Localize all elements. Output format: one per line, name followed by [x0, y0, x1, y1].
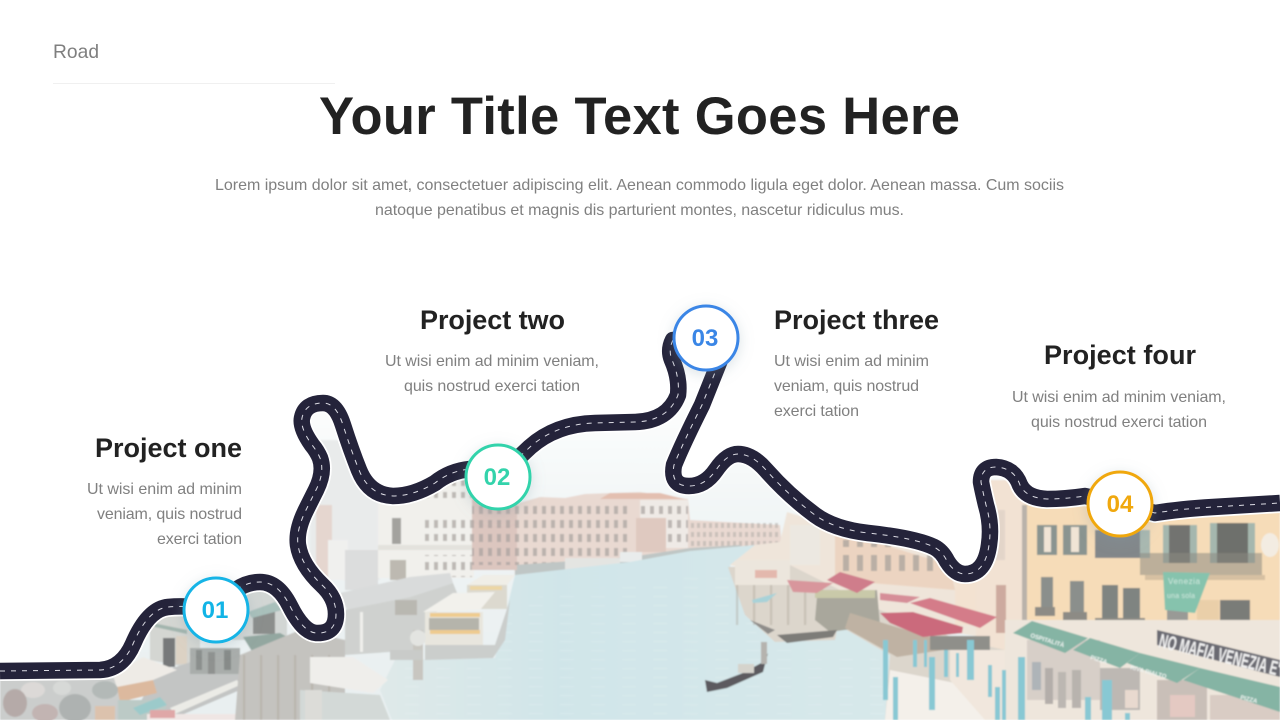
body: Project one: veniam, quis nostrud: [97, 506, 242, 523]
body: Project two: Ut wisi enim ad minim veniam,: [385, 353, 599, 370]
body: Project one: Ut wisi enim ad minim: [87, 481, 242, 498]
body: Project three: veniam, quis nostrud: [774, 378, 919, 395]
marker 01: 01: [202, 597, 228, 624]
body: Project three: exerci tation: [774, 403, 859, 420]
marker 03: 03: [692, 325, 718, 352]
body: Project four: quis nostrud exerci tation: [1031, 414, 1207, 431]
shops beneath awnings: [1005, 620, 1280, 720]
road edge highlight: [0, 338, 1280, 671]
project one text: [87, 433, 242, 548]
water ripples: [392, 570, 885, 720]
subtitle: natoque penatibus et magnis dis parturient montes, nascetur ridiculus mus.: [375, 202, 904, 219]
market and red awnings: [728, 560, 1005, 720]
background photo: Venice canal: [0, 439, 1280, 720]
marker 04: [1088, 472, 1152, 536]
subtitle: [215, 177, 1064, 219]
awning lettering: PIZZA: [1089, 655, 1108, 666]
mooring poles: [883, 640, 1130, 720]
marker 03: [674, 306, 738, 370]
heading: Project one: Project one: [95, 433, 242, 463]
title: Your Title Text Goes Here: [319, 87, 960, 146]
road centre dashes: [0, 338, 1280, 671]
pier roofs and water-bus stops: [340, 573, 515, 680]
green awnings: [1013, 621, 1280, 712]
project three text: [774, 305, 939, 420]
heading: Project two: Project two: [420, 305, 565, 335]
awning lettering: [1029, 632, 1258, 705]
marker 02: 02: [484, 464, 510, 491]
canal water: [380, 543, 890, 720]
body: Project four: [1012, 389, 1226, 431]
road surface: [0, 338, 1280, 671]
gondola: [705, 642, 768, 692]
marker 04: 04: [1107, 491, 1134, 518]
body: Project one: exerci tation: [157, 531, 242, 548]
body: Project two: [385, 353, 599, 395]
body: Project two: quis nostrud exerci tation: [404, 378, 580, 395]
scaffolded building and palace on left: [310, 440, 517, 590]
quay and crowd lower left: [0, 590, 390, 720]
green banner: Venezia: [1168, 577, 1201, 586]
awning lettering: RIVA RIALTO: [1129, 665, 1167, 681]
project two text: [385, 305, 599, 395]
road: [0, 338, 1280, 671]
body: Project one: [87, 481, 242, 548]
awning lettering: OSPITALITÀ: [1029, 632, 1066, 649]
body: Project four: Ut wisi enim ad minim veniam,: [1012, 389, 1226, 406]
body: Project three: Ut wisi enim ad minim: [774, 353, 929, 370]
orange building: [1022, 504, 1280, 621]
awning lettering: PIZZA: [1240, 695, 1258, 705]
green banner: una sola: [1167, 593, 1195, 600]
distant skyline buildings: [512, 492, 782, 580]
heading: Project three: Project three: [774, 305, 939, 335]
body: Project three: [774, 353, 929, 420]
project four text: [1012, 340, 1226, 431]
marker 02: [466, 445, 530, 509]
section label: Road: [53, 42, 99, 63]
right bank buildings: [730, 480, 1025, 650]
subtitle: Lorem ipsum dolor sit amet, consectetuer adipiscing elit. Aenean commodo ligula eget dolor. Aenean massa. Cum sociis: [215, 177, 1064, 194]
heading: Project four: Project four: [1044, 340, 1196, 370]
marker 01: [184, 578, 248, 642]
green banner: [1163, 572, 1210, 613]
photo sky: [132, 458, 1002, 720]
header divider: [53, 83, 335, 84]
